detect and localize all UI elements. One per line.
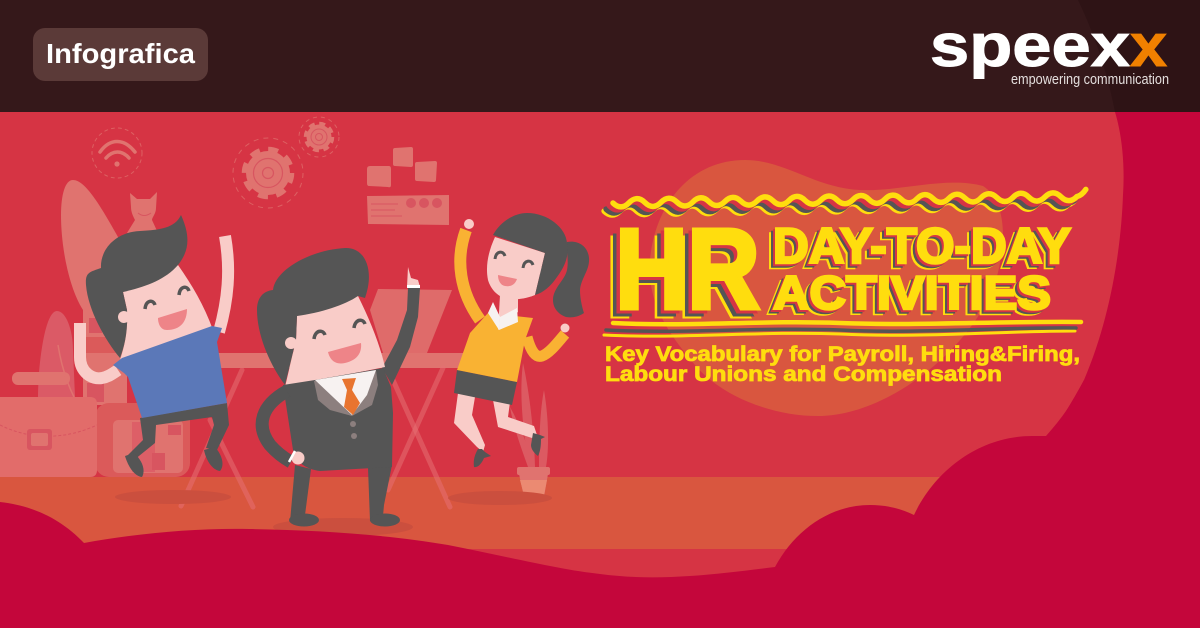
title: HR: HR <box>606 214 750 340</box>
mouth <box>498 275 517 286</box>
subtitle: Labour Unions and Compensation <box>605 363 1002 386</box>
character: man in blue shirt <box>80 215 229 477</box>
hair <box>86 215 187 358</box>
plant and pot <box>510 363 550 497</box>
eyes <box>314 320 365 339</box>
table legs <box>181 368 450 507</box>
trousers and feet <box>125 403 229 477</box>
skirt <box>454 370 517 405</box>
mouth <box>328 343 361 363</box>
icon: wifi <box>92 128 142 178</box>
raised arm <box>460 230 480 320</box>
subtitle <box>605 343 1080 386</box>
title: DAY-TO-DAY: DAY-TO-DAY <box>767 223 1065 279</box>
sweater <box>457 313 533 382</box>
cat <box>127 192 158 233</box>
character: man in suit <box>257 248 420 527</box>
right arm <box>527 334 565 356</box>
icon: small gear <box>299 117 339 157</box>
app tiles <box>367 147 437 187</box>
jacket buttons <box>350 421 357 439</box>
head <box>285 296 385 387</box>
raised arm <box>382 288 420 385</box>
ear <box>118 311 130 323</box>
right hand <box>560 324 570 332</box>
suit jacket <box>283 368 393 471</box>
white shirt <box>315 370 376 415</box>
title: HR: HR <box>616 206 760 332</box>
title: ACTIVITIES: ACTIVITIES <box>771 268 1049 321</box>
eyes <box>145 287 189 309</box>
subtitle: Key Vocabulary for Payroll, Hiring&Firing, <box>605 343 1080 366</box>
logo: speexx <box>930 12 1169 88</box>
lapels <box>314 370 378 416</box>
plant leaf <box>61 180 125 320</box>
browser panel <box>367 195 449 225</box>
character: woman in yellow sweater <box>454 213 589 467</box>
title: HR: HR <box>612 209 756 335</box>
icon: large gear <box>233 138 303 208</box>
ear <box>285 337 297 349</box>
mouth <box>158 309 187 330</box>
raised arms <box>80 236 228 378</box>
ponytail <box>553 242 589 317</box>
head <box>120 265 213 360</box>
backpack <box>83 310 190 477</box>
laptop <box>370 289 452 353</box>
title: DAY-TO-DAY: DAY-TO-DAY <box>773 218 1071 274</box>
logo: speexx: speex <box>930 12 1130 79</box>
floor shadows <box>115 490 552 536</box>
background illustration: office items <box>0 117 550 507</box>
logo: speexx: x <box>1130 12 1167 79</box>
legs and shoes <box>289 465 400 526</box>
title: ACTIVITIES: ACTIVITIES <box>769 270 1047 322</box>
title ornament: top wavy line <box>604 189 1086 215</box>
peach blob behind title <box>650 160 1003 416</box>
title: ACTIVITIES: ACTIVITIES <box>773 266 1051 319</box>
badge: Infografica <box>33 28 208 81</box>
ear <box>538 267 546 275</box>
hand on hip <box>289 451 304 464</box>
dark header band <box>0 0 1200 112</box>
hair <box>257 248 369 385</box>
table top <box>218 353 463 368</box>
header right darker shape <box>1078 0 1200 112</box>
raised hand <box>407 267 420 288</box>
bottom crimson wave <box>0 380 1200 628</box>
eyes <box>495 252 533 268</box>
title ornament: lower wavy line <box>604 322 1081 336</box>
shoes <box>474 433 545 467</box>
background: red blob panel <box>0 112 1124 600</box>
hair <box>493 213 568 295</box>
badge: Infografica: Infografica <box>46 38 195 69</box>
title: DAY-TO-DAY: DAY-TO-DAY <box>769 222 1067 278</box>
office chair <box>12 311 75 397</box>
raised hand <box>464 219 474 229</box>
title: ACTIVITIES: ACTIVITIES <box>767 271 1045 324</box>
legs <box>454 393 537 452</box>
neck and collar <box>488 295 518 330</box>
bent arm <box>262 391 291 462</box>
blue shirt <box>113 326 227 418</box>
title: HR: HR <box>608 212 752 338</box>
face <box>487 237 545 299</box>
orange tie <box>342 378 360 415</box>
briefcase <box>0 397 97 477</box>
logo tagline: empowering communication <box>1011 72 1169 88</box>
title: DAY-TO-DAY: DAY-TO-DAY <box>771 220 1069 276</box>
floor band <box>0 477 980 549</box>
